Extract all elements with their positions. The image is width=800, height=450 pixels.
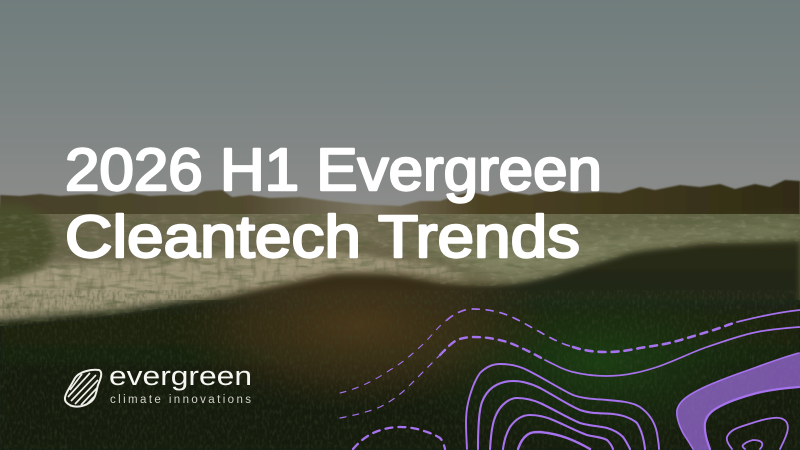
dashed contour upper, thick part (573, 322, 737, 352)
dashed contour lower, thick part (440, 337, 545, 360)
field (0, 214, 800, 330)
concentric line 5 (518, 432, 590, 449)
logo wordmark: evergreen (109, 361, 252, 391)
band inner edge (705, 387, 799, 449)
inner loop (727, 418, 788, 449)
solid contour lower (545, 327, 800, 376)
treeline (0, 180, 800, 218)
pale grass band (0, 252, 470, 322)
concentric line 2 (478, 381, 645, 449)
dashed contour upper, medium part (447, 309, 573, 347)
title: Cleantech Trends (65, 204, 580, 270)
dashed contour lower, thin part (340, 355, 440, 418)
solid contour upper (737, 310, 800, 322)
field mottling (0, 214, 800, 326)
left corn foliage (0, 204, 56, 284)
purple contour lines (340, 309, 800, 450)
dark ground (0, 241, 800, 450)
band outer edge (677, 353, 799, 449)
logo tagline: climate innovations (110, 394, 251, 406)
dashed contour upper, thin part (340, 320, 447, 393)
title (65, 137, 602, 270)
filled band (677, 353, 800, 450)
title: 2026 H1 Evergreen (65, 137, 602, 203)
concentric line 4 (503, 415, 613, 449)
grass grain texture (0, 290, 800, 450)
sun glow (170, 240, 550, 410)
dark ground base (0, 300, 800, 450)
right pale crop band (400, 222, 800, 285)
concentric line 3 (490, 398, 630, 449)
concentric line 1 (466, 364, 659, 449)
logo (65, 361, 252, 407)
smallest loop (743, 440, 762, 449)
logo icon (65, 370, 101, 407)
green lawn tint (400, 275, 800, 450)
sky background (0, 0, 800, 216)
dashed arc bottom (353, 427, 445, 449)
